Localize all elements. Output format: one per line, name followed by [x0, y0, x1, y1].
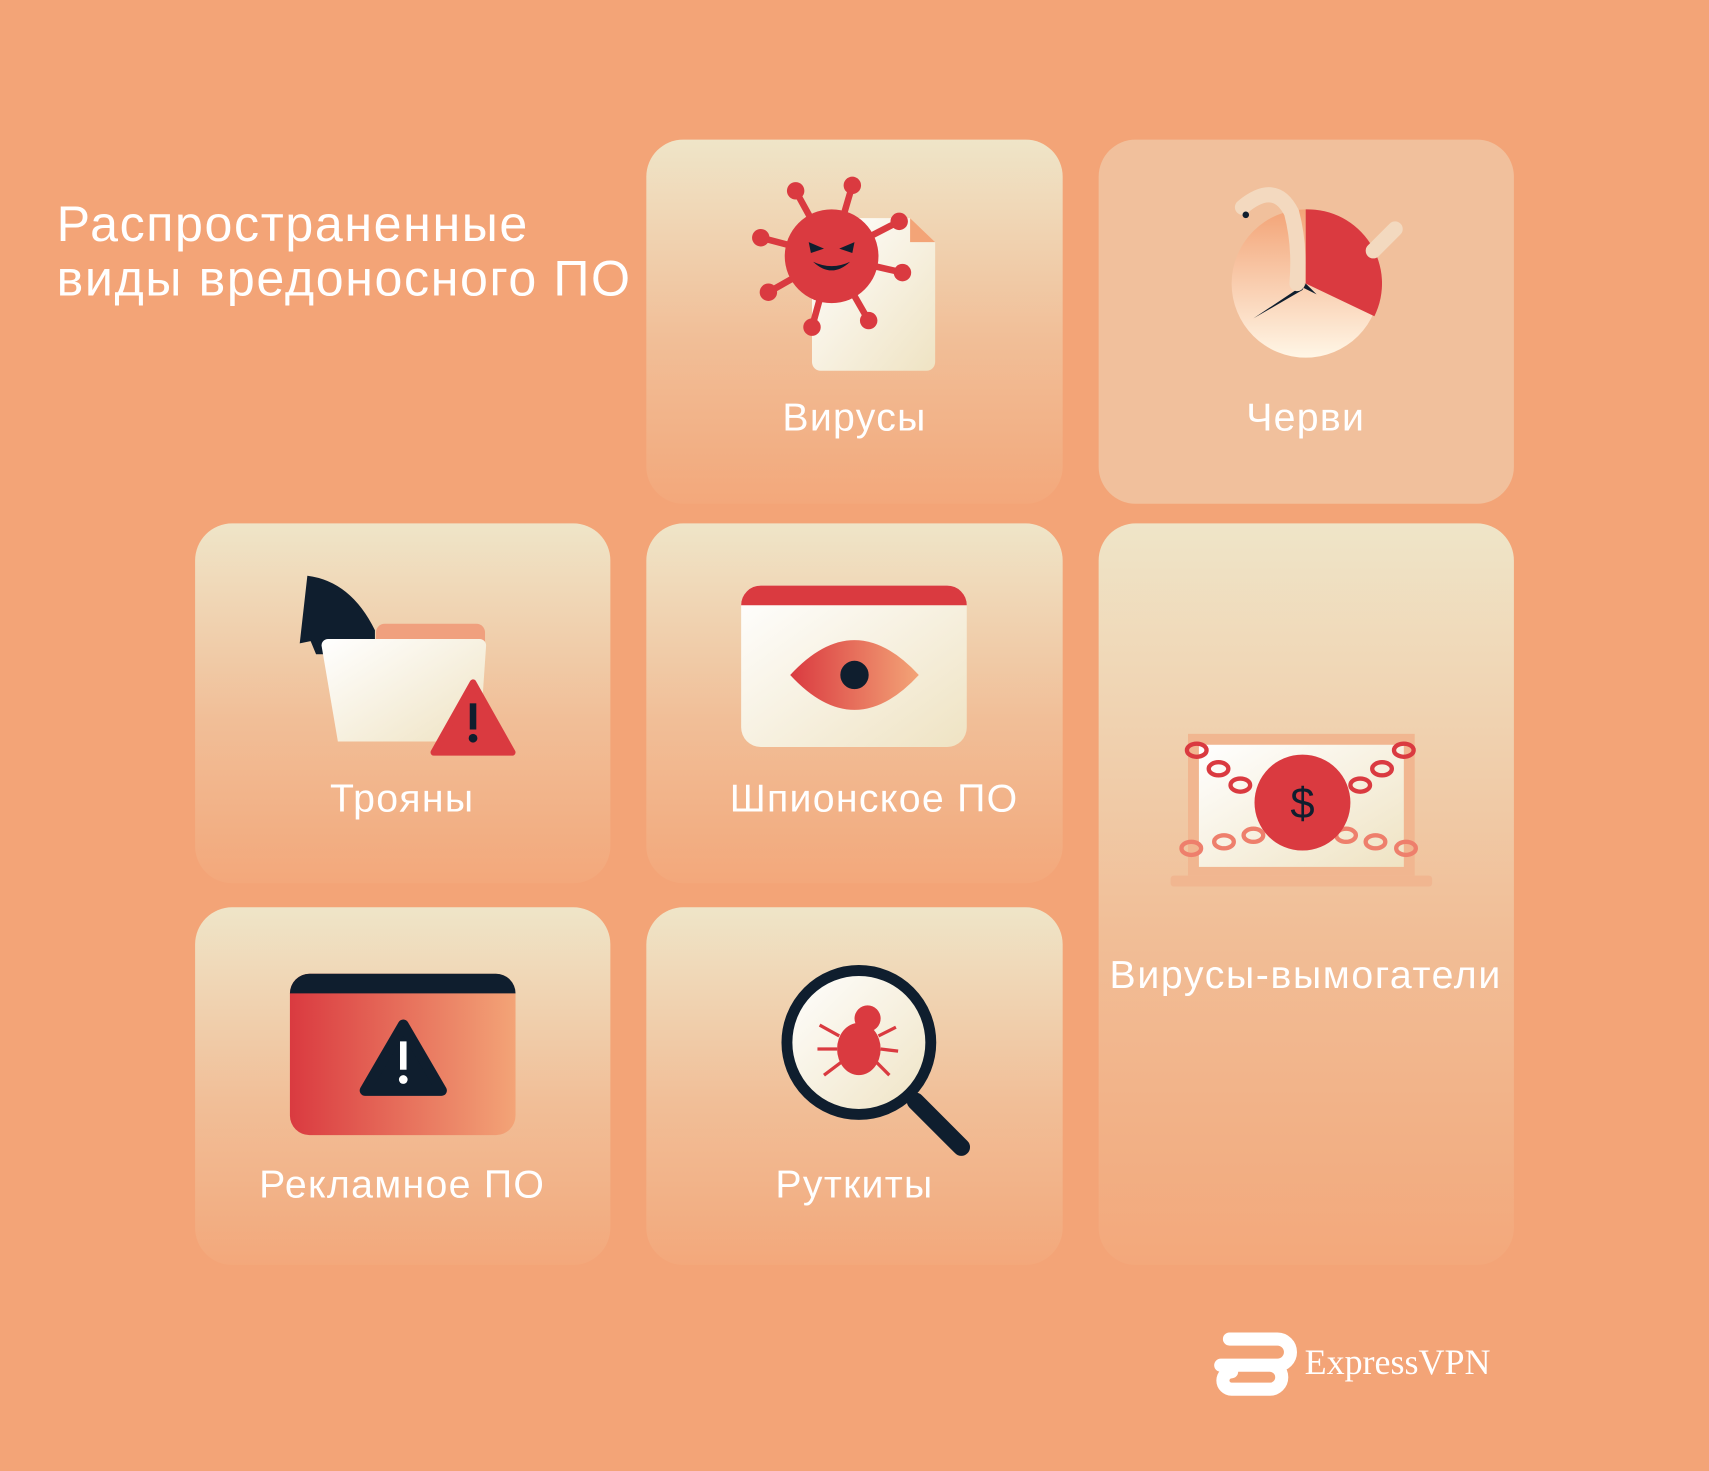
panel: viruses	[646, 140, 1063, 504]
panel: worms	[1099, 140, 1514, 504]
panel: ransomware	[1099, 523, 1514, 1265]
icon: chained laptop: $	[1290, 780, 1315, 828]
title	[57, 196, 632, 307]
icon: worm clock	[1232, 195, 1395, 358]
icon: chained laptop	[1171, 734, 1432, 887]
icon: magnifier with bug	[787, 970, 961, 1147]
icon: warning window	[290, 974, 516, 1135]
logo: ExpressVPN: ExpressVPN	[1305, 1342, 1490, 1382]
label: viruses: Вирусы	[782, 396, 927, 440]
panel: adware	[195, 907, 610, 1265]
panel: spyware	[646, 523, 1063, 883]
label: worms: Черви	[1246, 396, 1365, 440]
panel: rootkits	[646, 907, 1063, 1265]
icon: eye window	[741, 586, 967, 747]
label: ransomware: Вирусы-вымогатели	[1110, 953, 1502, 997]
logo: ExpressVPN	[1221, 1339, 1490, 1389]
icon: trojan horse folder	[300, 576, 512, 752]
icon: virus on document	[752, 177, 935, 371]
label: adware: Рекламное ПО	[259, 1162, 545, 1206]
label: spyware: Шпионское ПО	[730, 776, 1018, 820]
title: Распространенные	[57, 196, 529, 252]
label: trojans: Трояны	[330, 776, 474, 820]
panel: trojans	[195, 523, 610, 883]
label: rootkits: Руткиты	[775, 1162, 934, 1206]
title: виды вредоносного ПО	[57, 250, 632, 307]
